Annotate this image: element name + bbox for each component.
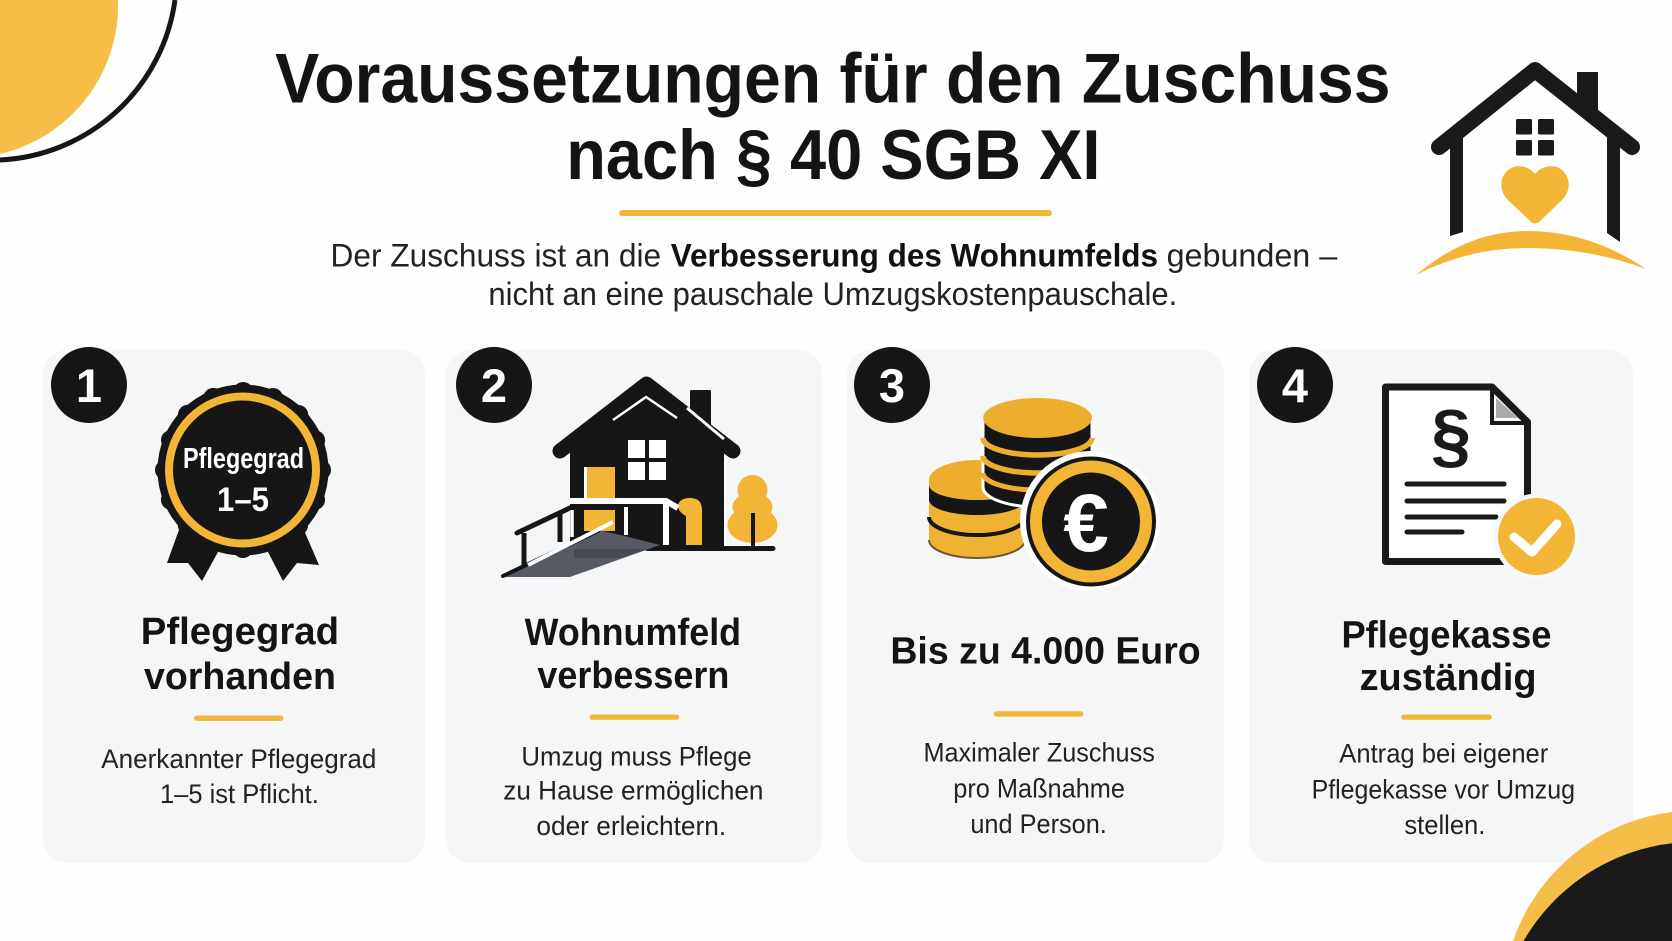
- icon: badge Pflegegrad 1–5: [158, 384, 328, 581]
- number badge 2: [456, 347, 532, 423]
- heading and text: card 4: zuständig: [1360, 656, 1537, 699]
- panel: Bis zu 4.000 Euro: [847, 347, 1224, 863]
- heading and text: card 1: Pflegegrad: [141, 610, 339, 653]
- heading and text: card 2: Umzug muss Pflege: [521, 742, 752, 772]
- panel: Pflegekasse zuständig: [1249, 347, 1633, 863]
- heading and text: card 4: stellen.: [1404, 810, 1485, 840]
- icon: coin stacks with euro coin: €: [1063, 478, 1109, 569]
- number badge 4: [1257, 347, 1333, 423]
- heading and text: card 1: Anerkannter Pflegegrad: [101, 744, 376, 774]
- heading and text: card 2: oder erleichtern.: [536, 811, 726, 841]
- subtitle: gebunden –: [1167, 238, 1337, 274]
- heading and text: card 2: Wohnumfeld: [525, 611, 741, 654]
- icon: house with heart: [1416, 70, 1646, 275]
- heading and text: card 4: Antrag bei eigener: [1339, 738, 1548, 768]
- subtitle: Der Zuschuss ist an die: [331, 238, 661, 274]
- number badge 1: 1: [76, 359, 102, 412]
- heading and text: card 1: 1–5 ist Pflicht.: [160, 779, 319, 809]
- decorative corner: bottom right: [1513, 812, 1672, 941]
- heading and text: card 3: [890, 629, 1201, 839]
- decorative corner: top left: [0, 0, 175, 160]
- subtitle: Verbesserung des Wohnumfelds: [671, 238, 1158, 274]
- number badge 3: [854, 347, 930, 423]
- title: Voraussetzungen für den Zuschuss: [275, 38, 1390, 117]
- title underline: [619, 210, 1052, 216]
- heading and text: card 1: [101, 610, 376, 809]
- heading and text: card 3: und Person.: [970, 809, 1107, 839]
- subtitle: [331, 238, 1337, 312]
- title: [275, 38, 1390, 194]
- heading and text: card 4: [1312, 613, 1575, 840]
- heading and text: card 3: Bis zu 4.000 Euro: [890, 629, 1201, 672]
- subtitle: nicht an eine pauschale Umzugskostenpauschale.: [488, 276, 1177, 312]
- number badge 2: 2: [481, 359, 507, 412]
- heading and text: card 2: zu Hause ermöglichen: [503, 776, 763, 806]
- heading and text: card 4: Pflegekasse vor Umzug: [1312, 775, 1575, 805]
- heading and text: card 2: [503, 611, 763, 841]
- heading and text: card 2: verbessern: [537, 654, 729, 697]
- heading and text: card 4: Pflegekasse: [1341, 613, 1552, 656]
- panel: Pflegegrad vorhanden: [43, 347, 425, 863]
- title: nach § 40 SGB XI: [566, 115, 1100, 194]
- number badge 3: 3: [879, 359, 905, 412]
- panel: Wohnumfeld verbessern: [446, 347, 822, 863]
- heading and text: card 1: vorhanden: [144, 655, 336, 698]
- heading and text: card 3: pro Maßnahme: [953, 774, 1125, 804]
- icon: badge Pflegegrad 1–5: Pflegegrad: [183, 443, 304, 475]
- number badge 1: [51, 347, 127, 423]
- icon: legal document with check: [1386, 387, 1580, 580]
- icon: legal document with check: §: [1431, 396, 1471, 476]
- number badge 4: 4: [1282, 359, 1308, 412]
- icon: coin stacks with euro coin: [929, 398, 1160, 591]
- heading and text: card 3: Maximaler Zuschuss: [923, 737, 1155, 767]
- icon: badge Pflegegrad 1–5: 1–5: [217, 481, 269, 519]
- icon: house with ramp: [503, 383, 778, 577]
